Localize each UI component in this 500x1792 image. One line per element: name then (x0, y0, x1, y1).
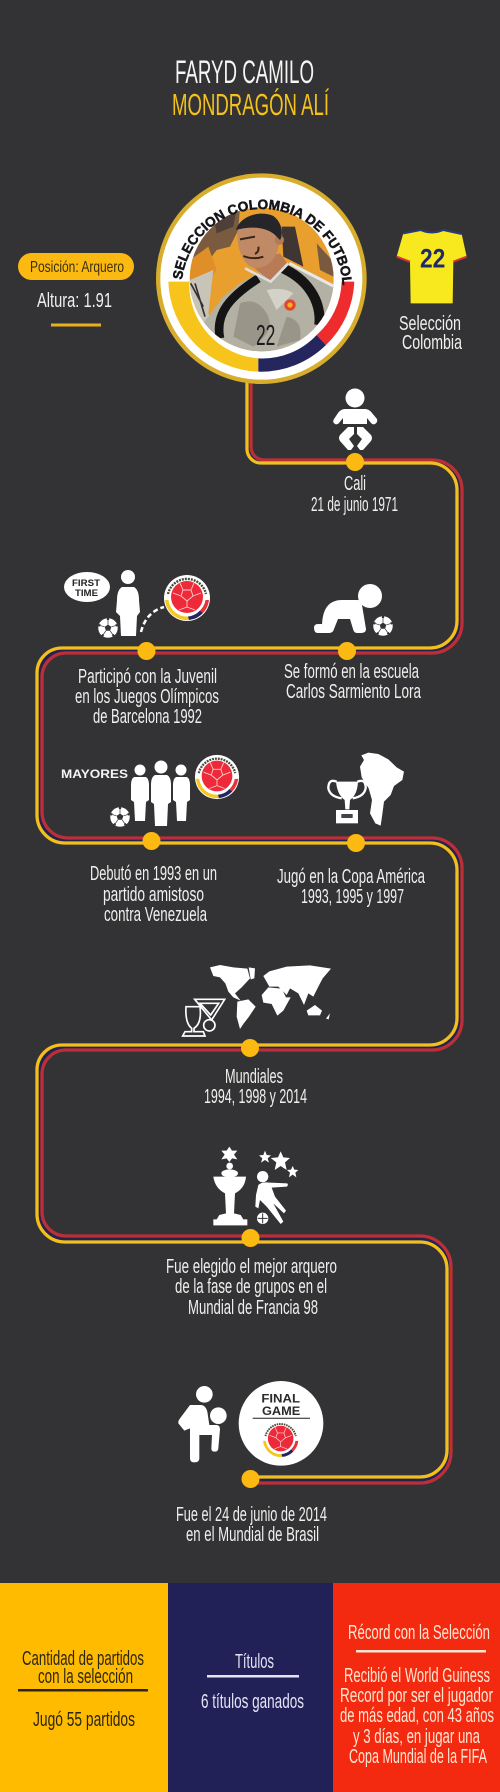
copa america text (277, 865, 425, 908)
jersey (397, 230, 467, 303)
school text: Se formó en la escuela (284, 660, 419, 683)
panel: titles: Títulos (235, 1650, 274, 1673)
debut text: Debutó en 1993 en un (90, 862, 217, 885)
birth text: Cali (344, 472, 366, 495)
best goalkeeper text: Fue elegido el mejor arquero (166, 1255, 337, 1278)
position and height block: Posición: Arquero (30, 259, 124, 276)
juvenil text (75, 665, 219, 728)
birth text (311, 472, 398, 516)
icon: baby (333, 388, 377, 450)
debut text: partido amistoso (103, 883, 204, 906)
panel: record (333, 1583, 500, 1792)
panel: matches: con la selección (38, 1665, 133, 1688)
icon: first time player with crest: TIME (75, 588, 98, 598)
jersey caption: Selección (399, 312, 461, 335)
icon: mayores team with crest: MAYORES (61, 767, 128, 781)
debut text: contra Venezuela (104, 903, 207, 926)
timeline path (37, 380, 462, 1483)
icon: cup and player with stars (213, 1147, 298, 1225)
jersey caption (399, 312, 462, 354)
position and height block (18, 253, 134, 326)
panel: matches: Jugó 55 partidos (33, 1708, 135, 1731)
jersey caption: Colombia (402, 331, 462, 354)
best goalkeeper text: de la fase de grupos en el (175, 1275, 327, 1298)
school text: Carlos Sarmiento Lora (286, 680, 421, 703)
title: MONDRAGÓN ALÍ (172, 87, 329, 122)
title: FARYD CAMILO (175, 54, 314, 90)
position and height block: Altura: 1.91 (37, 289, 112, 312)
icon: final game badge (239, 1381, 323, 1466)
copa america text: 1993, 1995 y 1997 (301, 885, 404, 908)
copa america text: Jugó en la Copa América (277, 865, 425, 888)
panel: titles: 6 títulos ganados (201, 1690, 304, 1713)
icon: first time player with crest: FIRST (72, 578, 101, 588)
icon: trophy and South America (328, 751, 404, 826)
birth text: 21 de junio 1971 (311, 493, 398, 516)
badge with photo: 22 (256, 320, 275, 352)
mundiales text: 1994, 1998 y 2014 (204, 1085, 307, 1108)
final game text (176, 1503, 327, 1546)
icon: player juggling ball (178, 1386, 227, 1462)
icon: final game badge: FINAL (261, 1392, 300, 1406)
school text (284, 660, 421, 703)
mundiales text (204, 1065, 307, 1108)
title (172, 54, 329, 122)
icon: final game badge: GAME (262, 1404, 300, 1418)
debut text (90, 862, 217, 926)
juvenil text: de Barcelona 1992 (93, 705, 202, 728)
final game text: en el Mundial de Brasil (186, 1523, 319, 1546)
icon: world map with trophy and medal (183, 965, 331, 1036)
mundiales text: Mundiales (225, 1065, 283, 1088)
final game text: Fue el 24 de junio de 2014 (176, 1503, 327, 1526)
icon: crawling baby with ball (314, 584, 393, 636)
timeline dots (138, 453, 365, 1488)
icon: first time player with crest (64, 570, 210, 638)
badge with photo (156, 173, 367, 384)
jersey: 22 (420, 243, 445, 273)
icon: mayores team with crest (61, 755, 239, 827)
best goalkeeper text: Mundial de Francia 98 (188, 1296, 318, 1319)
panel: titles (168, 1583, 333, 1792)
panel: matches (0, 1583, 168, 1792)
panel: matches: Cantidad de partidos (22, 1647, 144, 1670)
juvenil text: Participó con la Juvenil (78, 665, 217, 688)
juvenil text: en los Juegos Olímpicos (75, 685, 219, 708)
badge with photo: SELECCION COLOMBIA DE FUTBOL (172, 199, 352, 286)
best goalkeeper text (166, 1255, 337, 1319)
